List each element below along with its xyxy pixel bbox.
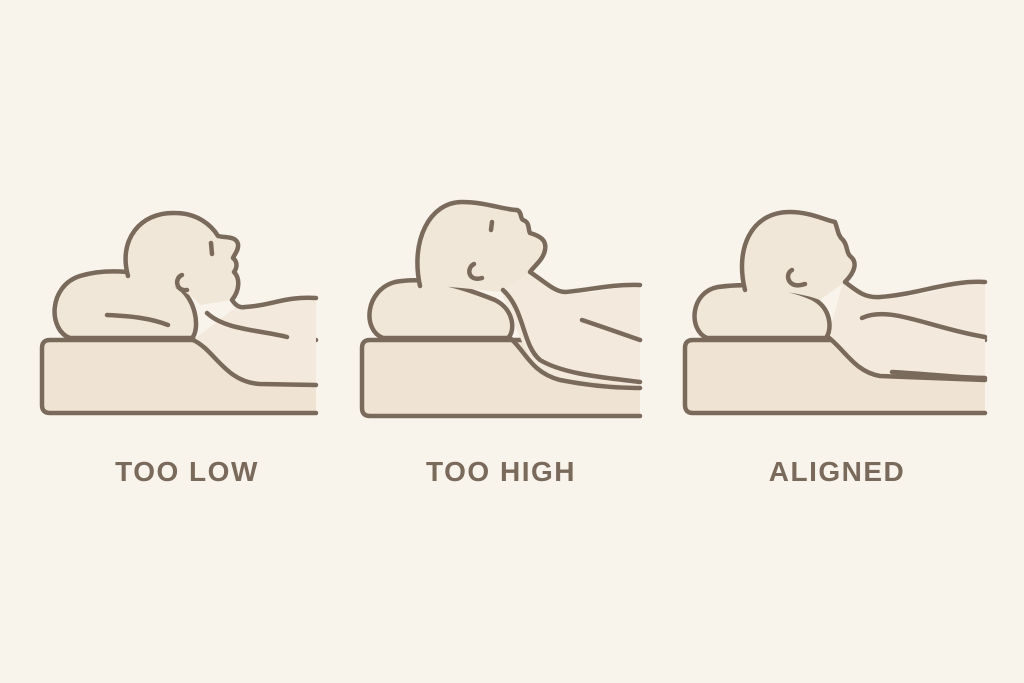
mattress: [685, 340, 985, 413]
panel: too low: [42, 213, 316, 413]
head: [126, 213, 238, 305]
chest line: [862, 314, 985, 337]
neck lines: [503, 290, 640, 382]
pillow: [369, 280, 512, 338]
ear: [177, 275, 187, 290]
label: too high: TOO HIGH: [426, 456, 576, 487]
arm line: [892, 372, 985, 378]
ear: [788, 270, 805, 285]
arm line: [107, 315, 168, 325]
body: [193, 298, 316, 386]
head: [417, 202, 545, 292]
mattress: [362, 340, 640, 416]
panel: aligned: [685, 212, 985, 413]
label: aligned: ALIGNED: [769, 456, 905, 487]
body: [500, 272, 640, 386]
head: [742, 212, 855, 300]
eye: [491, 222, 492, 230]
ear: [469, 264, 482, 279]
label: too low: TOO LOW: [115, 456, 259, 487]
pillow: [55, 271, 196, 338]
chest line: [207, 313, 287, 337]
mattress: [42, 340, 316, 413]
pillow: [695, 285, 829, 338]
body: [828, 282, 985, 380]
arm line: [582, 320, 640, 340]
eye: [211, 243, 212, 254]
panel: too high: [362, 202, 640, 416]
